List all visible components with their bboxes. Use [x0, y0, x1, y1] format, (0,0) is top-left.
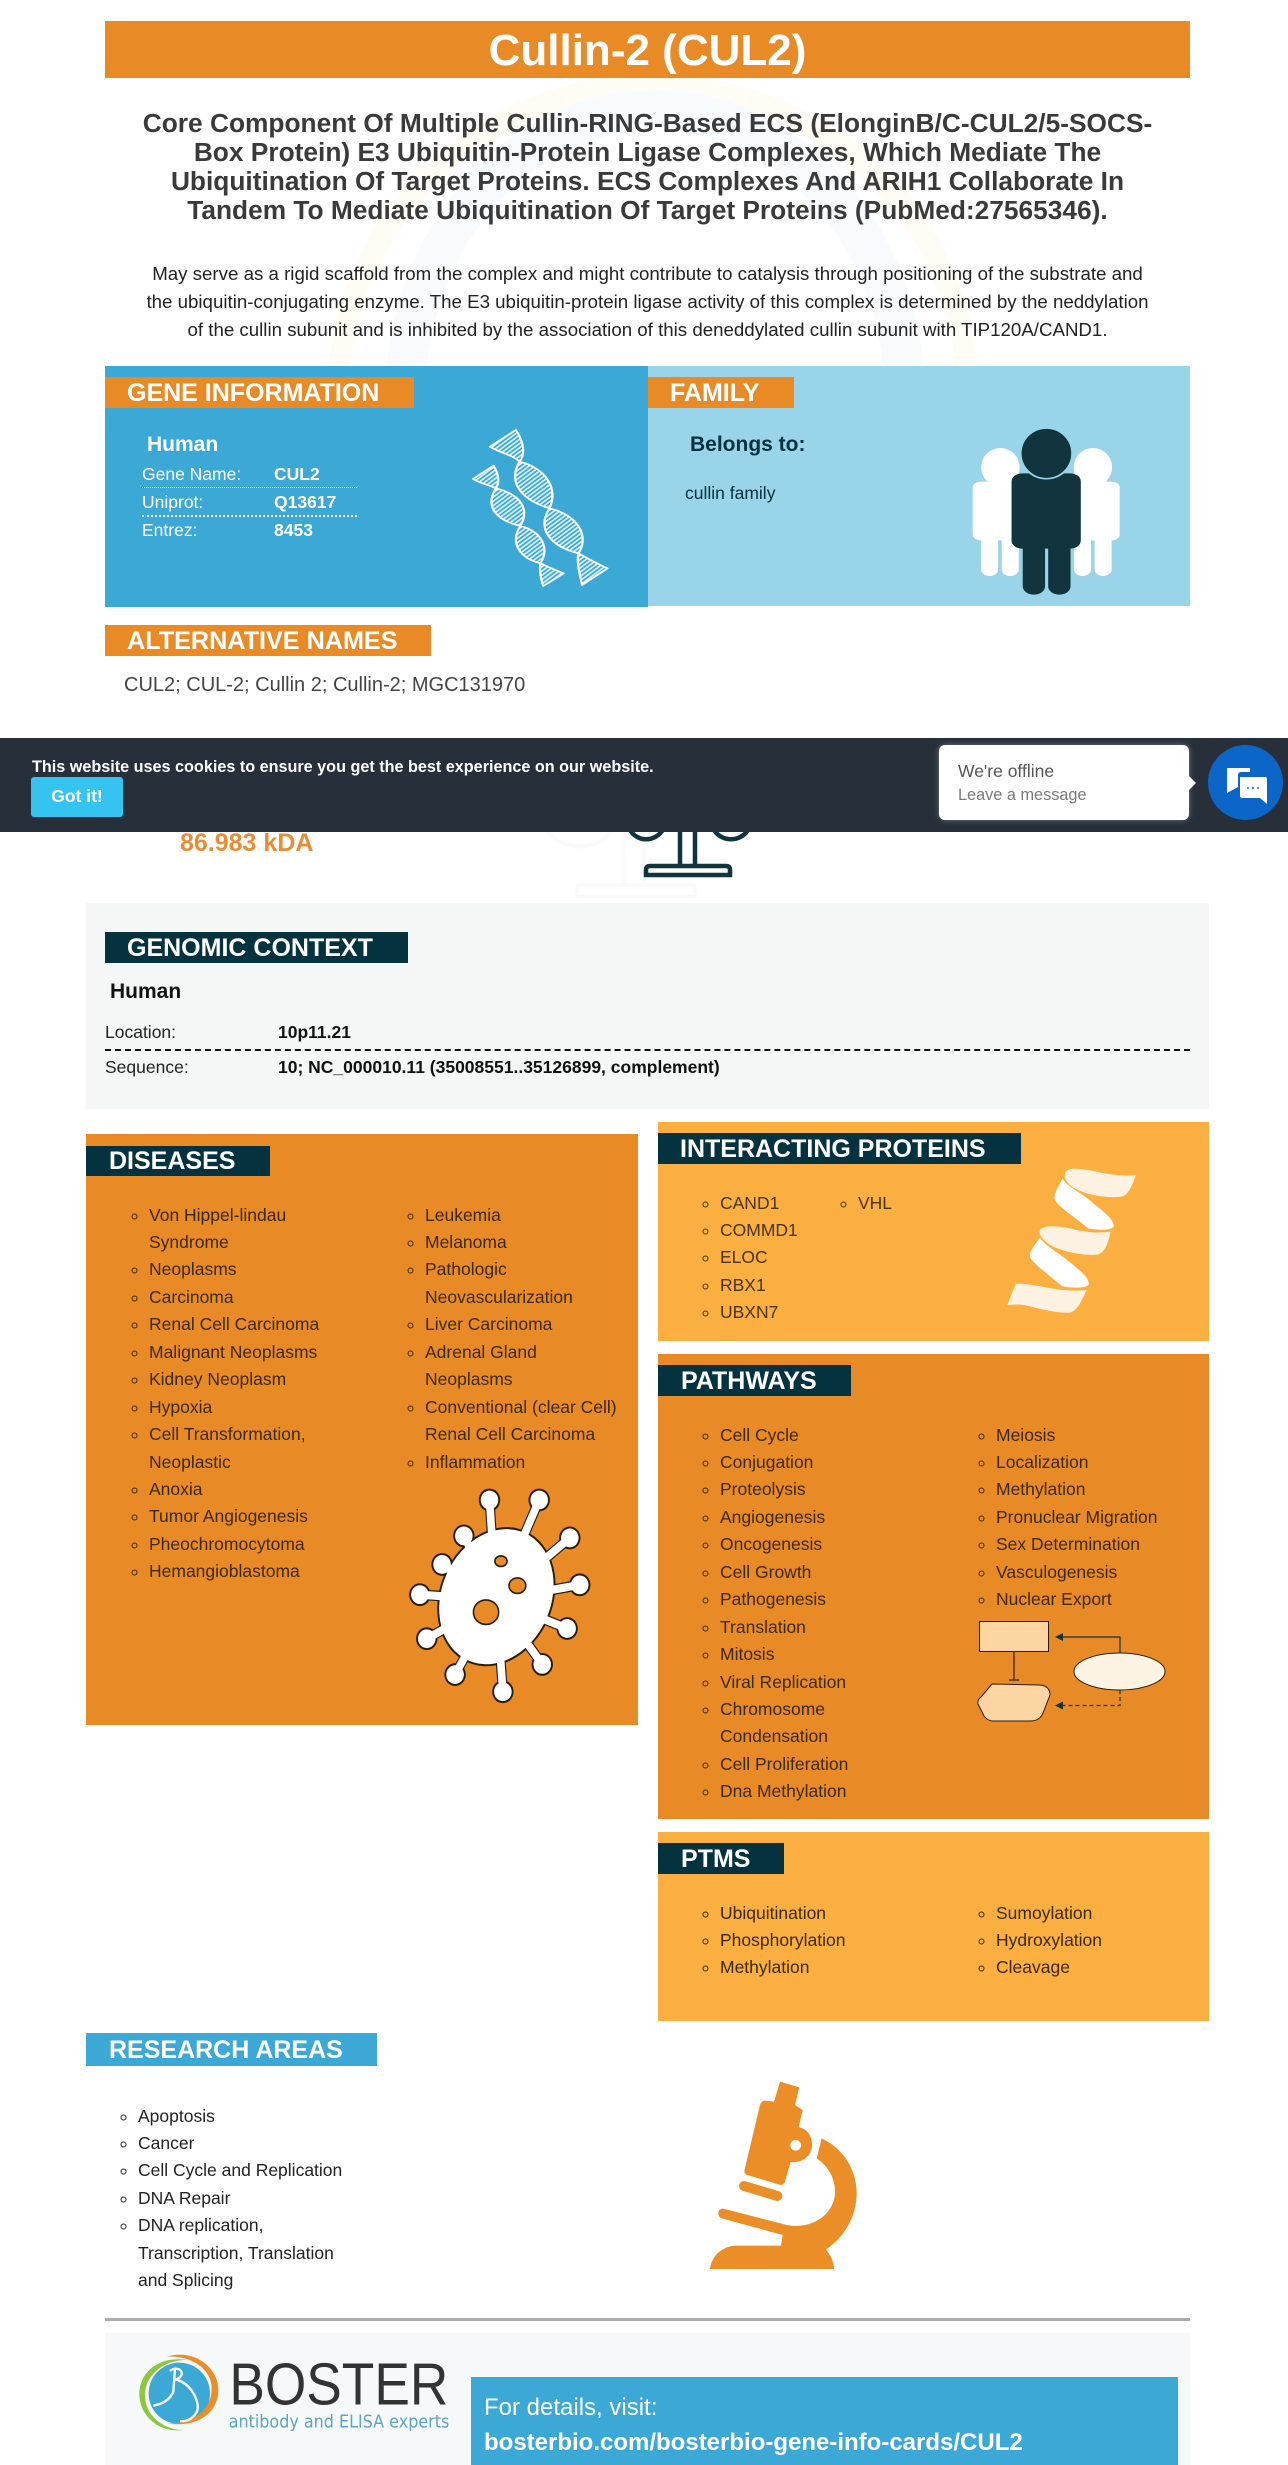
pathway list column 2: Sex Determination — [996, 1534, 1140, 1554]
disease list column 1: Von Hippel-lindau — [149, 1204, 286, 1224]
ptm list column 2 — [978, 1902, 1102, 1977]
protein list column 1: COMMD1 — [720, 1220, 798, 1240]
icon: ghost balance scale — [530, 825, 710, 900]
entrez row: 8453 — [274, 520, 313, 540]
icon: virus — [409, 1488, 590, 1704]
disease list column 2: Melanoma — [425, 1232, 507, 1252]
pathway list column 2 — [978, 1424, 1157, 1609]
research areas list: Cell Cycle and Replication — [138, 2160, 342, 2180]
cookie message: This website uses cookies to ensure you get the best experience on our website. — [32, 758, 654, 776]
panel: family — [648, 366, 1190, 606]
gene name row: Gene Name: — [142, 464, 241, 484]
protein list column 1 — [702, 1192, 798, 1322]
panel: genomic context — [86, 903, 1209, 1109]
subtitle: Ubiquitination Of Target Proteins. ECS Complexes And ARIH1 Collaborate In — [171, 166, 1124, 196]
chat popup — [939, 745, 1189, 820]
pathway list column 1: Condensation — [720, 1726, 828, 1746]
disease list column 2: Leukemia — [425, 1204, 501, 1224]
heading: alternative names: ALTERNATIVE NAMES — [127, 627, 398, 655]
background watermark logo — [328, 78, 978, 366]
disease list column 1: Hemangioblastoma — [149, 1561, 300, 1581]
cookie banner — [0, 738, 1288, 832]
pathway list column 2: Methylation — [996, 1479, 1086, 1499]
molecular mass value: 86.983 kDA — [180, 829, 313, 857]
research areas list — [120, 2106, 342, 2290]
pathway list column 1: Mitosis — [720, 1644, 774, 1664]
pathway list column 1: Dna Methylation — [720, 1781, 846, 1801]
icon: DNA — [472, 429, 609, 587]
subtitle: Box Protein) E3 Ubiquitin-Protein Ligase Complexes, Which Mediate The — [194, 137, 1101, 167]
cookie button: Got it! — [51, 786, 103, 806]
pathway list column 1 — [702, 1424, 848, 1801]
logo: Boster — [139, 2350, 449, 2433]
heading: diseases — [86, 1146, 270, 1176]
disease list column 2: Conventional (clear Cell) — [425, 1397, 617, 1417]
ptm list column 2: Hydroxylation — [996, 1930, 1102, 1950]
chat prompt: Leave a message — [958, 786, 1087, 804]
pathway list column 1: Chromosome — [720, 1699, 825, 1719]
icon: family group — [972, 428, 1120, 595]
location row — [105, 1022, 351, 1042]
panel: gene information — [105, 366, 648, 607]
pathway list column 1: Proteolysis — [720, 1479, 806, 1499]
heading: research areas — [86, 2033, 377, 2066]
species label: Human — [110, 980, 181, 1003]
pathway list column 2: Pronuclear Migration — [996, 1507, 1157, 1527]
pathway list column 1: Cell Cycle — [720, 1424, 799, 1444]
icon: protein ribbon — [1007, 1168, 1136, 1313]
description: the ubiquitin-conjugating enzyme. The E3 ubiquitin-protein ligase activity of this complex is determined by the neddylation — [146, 291, 1149, 312]
research areas list: Apoptosis — [138, 2106, 215, 2126]
panel: pathways — [658, 1354, 1209, 1819]
disease list column 1: Renal Cell Carcinoma — [149, 1314, 319, 1334]
ptm list column 1: Phosphorylation — [720, 1930, 846, 1950]
pathway list column 2: Localization — [996, 1452, 1088, 1472]
disease list column 1 — [132, 1204, 320, 1581]
research areas list: Transcription, Translation — [138, 2243, 334, 2263]
disease list column 2: Renal Cell Carcinoma — [425, 1424, 595, 1444]
pathway list column 1: Cell Proliferation — [720, 1754, 848, 1774]
family name: cullin family — [685, 483, 775, 503]
disease list column 1: Pheochromocytoma — [149, 1534, 305, 1554]
pathway list column 1: Angiogenesis — [720, 1507, 825, 1527]
protein list column 1: CAND1 — [720, 1192, 779, 1212]
ptm list column 1: Ubiquitination — [720, 1902, 826, 1922]
description: of the cullin subunit and is inhibited by the association of this deneddylated cullin subunit with TIP120A/CAND1. — [187, 319, 1108, 340]
uniprot row — [142, 490, 357, 517]
disease list column 2: Inflammation — [425, 1452, 525, 1472]
location row: 10p11.21 — [278, 1022, 351, 1042]
sequence row: 10; NC_000010.11 (35008551..35126899, complement) — [278, 1057, 720, 1077]
alternative names text: CUL2; CUL-2; Cullin 2; Cullin-2; MGC131970 — [124, 674, 525, 696]
disease list column 2: Pathologic — [425, 1259, 507, 1279]
heading: ptms: PTMS — [681, 1845, 750, 1873]
disease list column 2 — [408, 1204, 617, 1472]
pathway list column 1: Conjugation — [720, 1452, 813, 1472]
entrez row — [142, 520, 313, 540]
icon: chat bubbles — [1227, 768, 1267, 804]
entrez row: Entrez: — [142, 520, 197, 540]
disease list column 2: Neovascularization — [425, 1287, 573, 1307]
disease list column 2: Liver Carcinoma — [425, 1314, 552, 1334]
pathway list column 1: Oncogenesis — [720, 1534, 822, 1554]
research areas list: Cancer — [138, 2133, 194, 2153]
chat status: We're offline — [958, 761, 1054, 781]
protein list column 1: RBX1 — [720, 1275, 766, 1295]
pathway list column 1: Translation — [720, 1617, 806, 1637]
protein list column 2: VHL — [858, 1192, 892, 1212]
disease list column 1: Anoxia — [149, 1479, 203, 1499]
gene name row: CUL2 — [274, 464, 320, 484]
heading: pathways — [658, 1365, 851, 1396]
research areas list: and Splicing — [138, 2270, 233, 2290]
description — [146, 263, 1149, 340]
panel: ptms — [658, 1832, 1209, 2021]
heading: ptms — [658, 1843, 784, 1874]
icon: pathway diagram — [977, 1621, 1166, 1722]
disease list column 1: Kidney Neoplasm — [149, 1369, 286, 1389]
location row: Location: — [105, 1022, 176, 1042]
ptm list column 2: Sumoylation — [996, 1902, 1092, 1922]
icon: balance scale — [628, 832, 750, 878]
subtitle: Core Component Of Multiple Cullin-RING-Based ECS (ElonginB/C-CUL2/5-SOCS- — [143, 108, 1152, 138]
call to action text: For details, visit: — [484, 2394, 657, 2421]
chat button — [1208, 745, 1283, 820]
logo: Boster: BOSTER — [229, 2350, 448, 2417]
subtitle — [143, 108, 1152, 225]
pathway list column 2: Meiosis — [996, 1424, 1055, 1444]
ptm list column 2: Cleavage — [996, 1957, 1070, 1977]
logo: Boster: antibody and ELISA experts — [229, 2413, 449, 2433]
pathway list column 2: Vasculogenesis — [996, 1562, 1117, 1582]
disease list column 1: Neoplasms — [149, 1259, 237, 1279]
disease list column 1: Cell Transformation, — [149, 1424, 306, 1444]
icon: microscope — [710, 2082, 857, 2269]
divider line — [105, 2318, 1190, 2321]
heading: gene information: GENE INFORMATION — [127, 379, 379, 407]
heading: pathways: PATHWAYS — [681, 1367, 817, 1395]
title — [105, 21, 1190, 78]
disease list column 1: Syndrome — [149, 1232, 229, 1252]
cookie button — [31, 777, 123, 817]
research areas list: DNA replication, — [138, 2215, 263, 2235]
disease list column 2: Adrenal Gland — [425, 1342, 537, 1362]
research areas list: DNA Repair — [138, 2188, 230, 2208]
dashed divider — [105, 1049, 1190, 1051]
heading: diseases: DISEASES — [109, 1147, 235, 1175]
sequence row: Sequence: — [105, 1057, 189, 1077]
protein list column 1: UBXN7 — [720, 1302, 778, 1322]
disease list column 1: Hypoxia — [149, 1397, 212, 1417]
pathway list column 1: Pathogenesis — [720, 1589, 826, 1609]
disease list column 1: Carcinoma — [149, 1287, 234, 1307]
disease list column 1: Malignant Neoplasms — [149, 1342, 317, 1362]
subtitle: Tandem To Mediate Ubiquitination Of Target Proteins (PubMed:27565346). — [187, 195, 1108, 225]
gene name row — [142, 462, 357, 488]
uniprot row: Q13617 — [274, 492, 336, 512]
description: May serve as a rigid scaffold from the complex and might contribute to catalysis through positioning of the substrate and — [152, 263, 1143, 284]
heading: family — [648, 377, 794, 408]
ptm list column 1 — [702, 1902, 846, 1977]
ptm list column 1: Methylation — [720, 1957, 810, 1977]
disease list column 1: Neoplastic — [149, 1452, 231, 1472]
protein list column 1: ELOC — [720, 1247, 768, 1267]
panel: diseases — [86, 1134, 638, 1725]
call to action url: bosterbio.com/bosterbio-gene-info-cards/CUL2 — [484, 2429, 1023, 2456]
pathway list column 1: Viral Replication — [720, 1672, 846, 1692]
pathway list column 1: Cell Growth — [720, 1562, 811, 1582]
species label: Human — [147, 433, 218, 456]
heading: research areas: RESEARCH AREAS — [109, 2036, 343, 2064]
panel: footer — [105, 2333, 1190, 2465]
disease list column 1: Tumor Angiogenesis — [149, 1506, 308, 1526]
panel: interacting proteins — [658, 1122, 1209, 1341]
title: Cullin-2 (CUL2) — [489, 26, 806, 75]
heading: genomic context: GENOMIC CONTEXT — [127, 934, 373, 962]
heading: family: FAMILY — [670, 379, 759, 407]
belongs to label: Belongs to: — [690, 433, 806, 456]
pathway list column 2: Nuclear Export — [996, 1589, 1112, 1609]
uniprot row: Uniprot: — [142, 492, 203, 512]
popup pointer — [1187, 774, 1196, 792]
heading: interacting proteins: INTERACTING PROTEINS — [680, 1135, 986, 1163]
disease list column 2: Neoplasms — [425, 1369, 513, 1389]
call to action — [471, 2377, 1178, 2465]
